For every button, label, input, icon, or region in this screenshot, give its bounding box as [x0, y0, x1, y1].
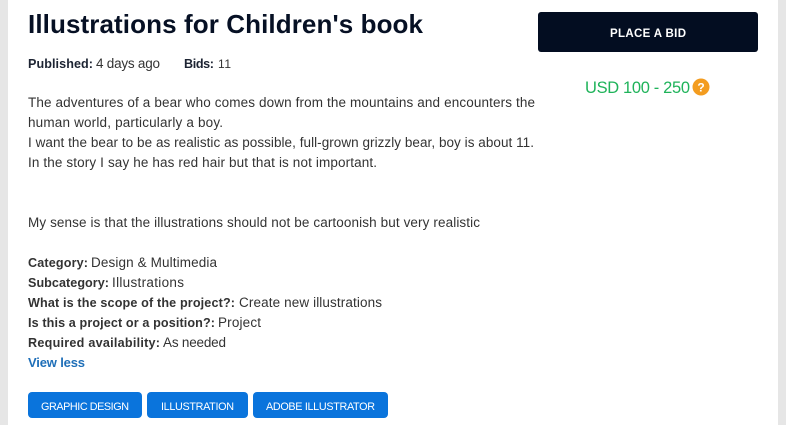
project details list: Is this a project or a position?:: [28, 316, 215, 330]
tag: graphic design: GRAPHIC DESIGN: [41, 401, 129, 413]
meta: published and bids: 11: [218, 57, 231, 71]
icon: help question mark: ?: [697, 80, 705, 94]
tag: adobe illustrator: ADOBE ILLUSTRATOR: [266, 401, 375, 413]
project details list: What is the scope of the project?:: [28, 296, 235, 310]
tag: illustration: ILLUSTRATION: [161, 401, 234, 413]
project details list: Project: [218, 315, 261, 330]
project details list: Required availability:: [28, 336, 160, 350]
project details list: Category:: [28, 256, 88, 270]
place a bid button: PLACE A BID: [610, 28, 686, 40]
meta: published and bids: 4 days ago: [96, 56, 160, 71]
meta: published and bids: Bids:: [184, 57, 214, 71]
place a bid button: [538, 12, 758, 52]
project details list: Design & Multimedia: [91, 255, 217, 270]
project description: I want the bear to be as realistic as possible, full-grown grizzly bear, boy is about 11.: [28, 135, 534, 150]
project description: In the story I say he has red hair but that is not important.: [28, 155, 377, 170]
tag: graphic design: [28, 392, 142, 418]
meta: published and bids: Published:: [28, 57, 93, 71]
project details list: As needed: [163, 335, 226, 350]
project details list: [28, 255, 382, 350]
view less link: View less: [28, 355, 85, 370]
project description: The adventures of a bear who comes down from the mountains and encounters the: [28, 95, 535, 110]
project description: [28, 95, 535, 230]
project description: human world, particularly a boy.: [28, 115, 223, 130]
tag: adobe illustrator: [253, 392, 388, 418]
icon: help question mark: [692, 78, 710, 96]
title: Illustrations for Children's book: [28, 9, 424, 39]
project details list: Subcategory:: [28, 276, 109, 290]
budget range: USD 100 - 250: [585, 79, 690, 97]
tag: illustration: [147, 392, 248, 418]
project details list: Create new illustrations: [239, 295, 382, 310]
project description: My sense is that the illustrations should not be cartoonish but very realistic: [28, 215, 480, 230]
meta: published and bids: [28, 56, 231, 71]
project details list: Illustrations: [112, 275, 184, 290]
